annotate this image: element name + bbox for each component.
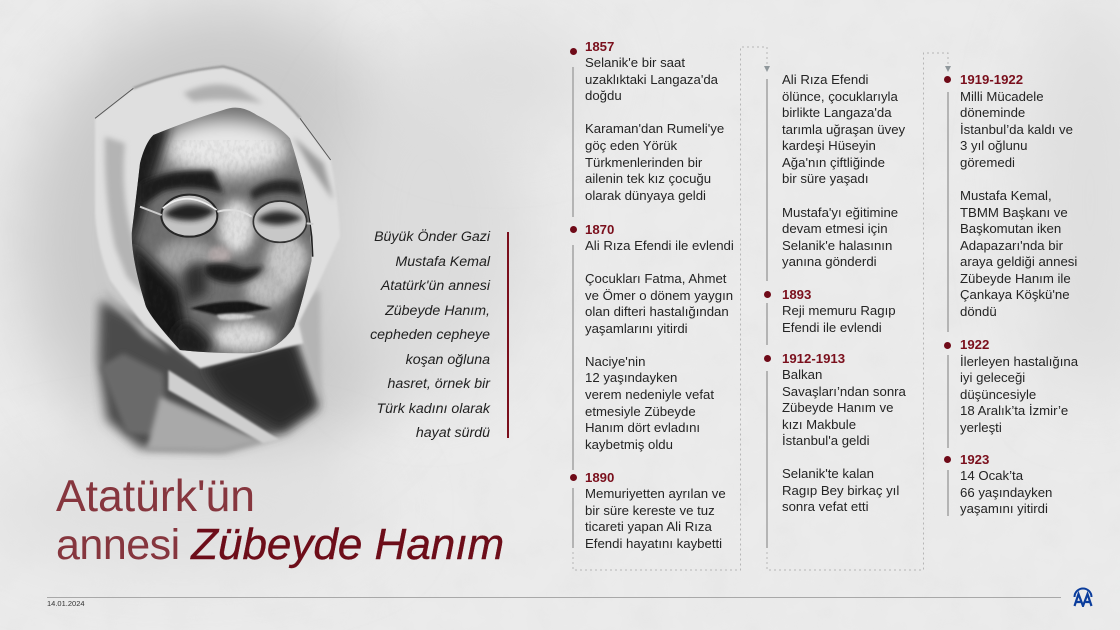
event: 1919-1922: göremedi	[960, 155, 1015, 170]
timeline column 2	[764, 72, 906, 548]
event: 1922: yerleşti	[960, 420, 1002, 435]
footer rule	[47, 597, 1061, 598]
connector: column 2 to column 3	[766, 52, 951, 570]
headscarf	[95, 67, 340, 443]
event: 1870	[570, 222, 734, 470]
event: 1857: doğdu	[585, 88, 622, 103]
event: 1919-1922	[944, 72, 1077, 332]
timeline column 1	[570, 39, 734, 551]
event: 1912-1913: Ragıp Bey birkaç yıl	[782, 483, 899, 498]
event: Ali Rıza Efendi passing: Ali Rıza Efendi	[782, 72, 868, 87]
quote text: koşan oğluna	[406, 352, 490, 368]
event: 1870: olan difteri hastalığından	[585, 304, 729, 319]
quote text: Atatürk'ün annesi	[381, 278, 490, 294]
event: 1857: göç eden Yörük	[585, 138, 677, 153]
event: 1890: ticareti yapan Ali Rıza	[585, 519, 712, 534]
event: Ali Rıza Efendi passing: kardeşi Hüseyin	[782, 138, 876, 153]
event: 1857: ailenin tek kız çocuğu	[585, 171, 711, 186]
eyeglasses	[140, 195, 313, 242]
quote text: Türk kadını olarak	[376, 401, 490, 417]
event: 1870: Hanım dört evladını	[585, 420, 700, 435]
event: 1919-1922: döndü	[960, 304, 997, 319]
event: 1919-1922: döneminde	[960, 105, 1025, 120]
quote text: hayat sürdü	[416, 425, 490, 441]
event: 1922: 18 Aralık’ta İzmir’e	[960, 403, 1068, 418]
event: 1857: uzaklıktaki Langaza'da	[585, 72, 718, 87]
quote text: cepheden cepheye	[370, 327, 490, 343]
quote text: Büyük Önder Gazi	[374, 229, 490, 245]
event: 1870: Çocukları Fatma, Ahmet	[585, 271, 726, 286]
event: 1912-1913: Selanik'te kalan	[782, 466, 874, 481]
timeline column 3	[944, 72, 1078, 516]
quote text: hasret, örnek bir	[387, 376, 490, 392]
event: 1870: Naciye'nin	[585, 354, 645, 369]
event: 1919-1922: Zübeyde Hanım ile	[960, 271, 1071, 286]
event: 1919-1922: İstanbul’da kaldı ve	[960, 122, 1073, 137]
event: Ali Rıza Efendi passing: birlikte Langaza'da	[782, 105, 892, 120]
event: 1919-1922: Adapazarı'nda bir	[960, 238, 1063, 253]
event: 1857: Selanik'e bir saat	[585, 55, 685, 70]
event: 1923	[944, 452, 1052, 516]
event: Ali Rıza Efendi passing: tarımla uğraşan üvey	[782, 122, 905, 137]
event: 1919-1922: 3 yıl oğlunu	[960, 138, 1027, 153]
event: 1912-1913	[764, 350, 906, 548]
quote text	[370, 229, 490, 441]
event: Ali Rıza Efendi passing: devam etmesi için	[782, 221, 888, 236]
event: 1893: Efendi ile evlendi	[782, 320, 882, 335]
portrait of Zübeyde Hanım	[90, 64, 339, 458]
event: 1919-1922: TBMM Başkanı ve	[960, 205, 1068, 220]
event: Ali Rıza Efendi passing	[766, 72, 905, 281]
title: annesi Zübeyde Hanım	[56, 520, 504, 568]
event: 1923: 66 yaşındayken	[960, 485, 1052, 500]
event: 1919-1922: 1919-1922	[960, 72, 1023, 87]
event: 1870: kaybetmiş oldu	[585, 437, 673, 452]
event: Ali Rıza Efendi passing: Selanik'e halasının	[782, 238, 892, 253]
event: 1919-1922: Çankaya Köşkü'ne	[960, 287, 1070, 302]
event: 1857: 1857	[585, 39, 614, 54]
event: 1912-1913: Balkan	[782, 367, 822, 382]
connector: column 1 to column 2	[572, 46, 770, 570]
event: 1919-1922: araya geldiği annesi	[960, 254, 1077, 269]
title	[56, 472, 504, 568]
event: 1890	[570, 470, 726, 551]
event: 1870: 1870	[585, 222, 614, 236]
event: Ali Rıza Efendi passing: Mustafa'yı eğitimine	[782, 205, 898, 220]
event: 1912-1913: Savaşları’ndan sonra	[782, 384, 906, 399]
event: 1922: düşüncesiyle	[960, 387, 1036, 402]
quote text: Zübeyde Hanım,	[385, 303, 490, 319]
quote text: Mustafa Kemal	[395, 254, 490, 270]
event: 1912-1913: sonra vefat etti	[782, 499, 868, 514]
event: 1890: Memuriyetten ayrılan ve	[585, 486, 726, 501]
event: 1893: 1893	[782, 286, 811, 302]
event: 1890: 1890	[585, 470, 614, 484]
event: Ali Rıza Efendi passing: ölünce, çocuklarıyla	[782, 89, 898, 104]
quote accent bar	[507, 232, 509, 438]
event: 1857: olarak dünyaya geldi	[585, 188, 706, 203]
event: 1870: Ali Rıza Efendi ile evlendi	[585, 238, 734, 253]
event: 1919-1922: Mustafa Kemal,	[960, 188, 1052, 203]
event: Ali Rıza Efendi passing: yanına gönderdi	[782, 254, 877, 269]
event: 1912-1913: 1912-1913	[782, 350, 845, 366]
event: Ali Rıza Efendi passing: bir süre yaşadı	[782, 171, 868, 186]
event: 1912-1913: İstanbul'a geldi	[782, 433, 870, 448]
event: 1890: bir süre kereste ve tuz	[585, 503, 715, 518]
event: 1923: yaşamını yitirdi	[960, 501, 1048, 516]
event: 1922: 1922	[960, 337, 989, 352]
lower garment shadow	[98, 290, 322, 452]
event: 1922: İlerleyen hastalığına	[960, 354, 1078, 369]
date: 14.01.2024	[47, 599, 85, 608]
event: 1857: Türkmenlerinden bir	[585, 155, 702, 170]
title: Atatürk'ün	[56, 472, 255, 521]
event: 1870: etmesiyle Zübeyde	[585, 404, 696, 419]
event: 1923: 1923	[960, 452, 989, 466]
event: 1870: verem nedeniyle vefat	[585, 387, 714, 402]
event: 1922	[944, 337, 1078, 448]
event: 1857: Karaman'dan Rumeli'ye	[585, 121, 724, 136]
event: 1870: 12 yaşındayken	[585, 370, 677, 385]
event: 1870: yaşamlarını yitirdi	[585, 321, 688, 336]
event: 1919-1922: Başkomutan iken	[960, 221, 1061, 236]
event: 1893	[764, 286, 896, 345]
event: 1912-1913: kızı Makbule	[782, 417, 856, 432]
event: 1870: ve Ömer o dönem yaygın	[585, 288, 733, 303]
event: 1890: Efendi hayatını kaybetti	[585, 536, 722, 551]
event: 1912-1913: Zübeyde Hanım ve	[782, 400, 893, 415]
event: 1922: iyi geleceği	[960, 370, 1025, 385]
icon: AA logo	[1074, 588, 1092, 607]
event: 1919-1922: Milli Mücadele	[960, 89, 1044, 104]
event: 1923: 14 Ocak’ta	[960, 468, 1023, 483]
event: 1857	[570, 39, 724, 217]
event: 1893: Reji memuru Ragıp	[782, 303, 896, 318]
event: Ali Rıza Efendi passing: Ağa'nın çiftliğinde	[782, 155, 885, 170]
face	[132, 108, 312, 354]
